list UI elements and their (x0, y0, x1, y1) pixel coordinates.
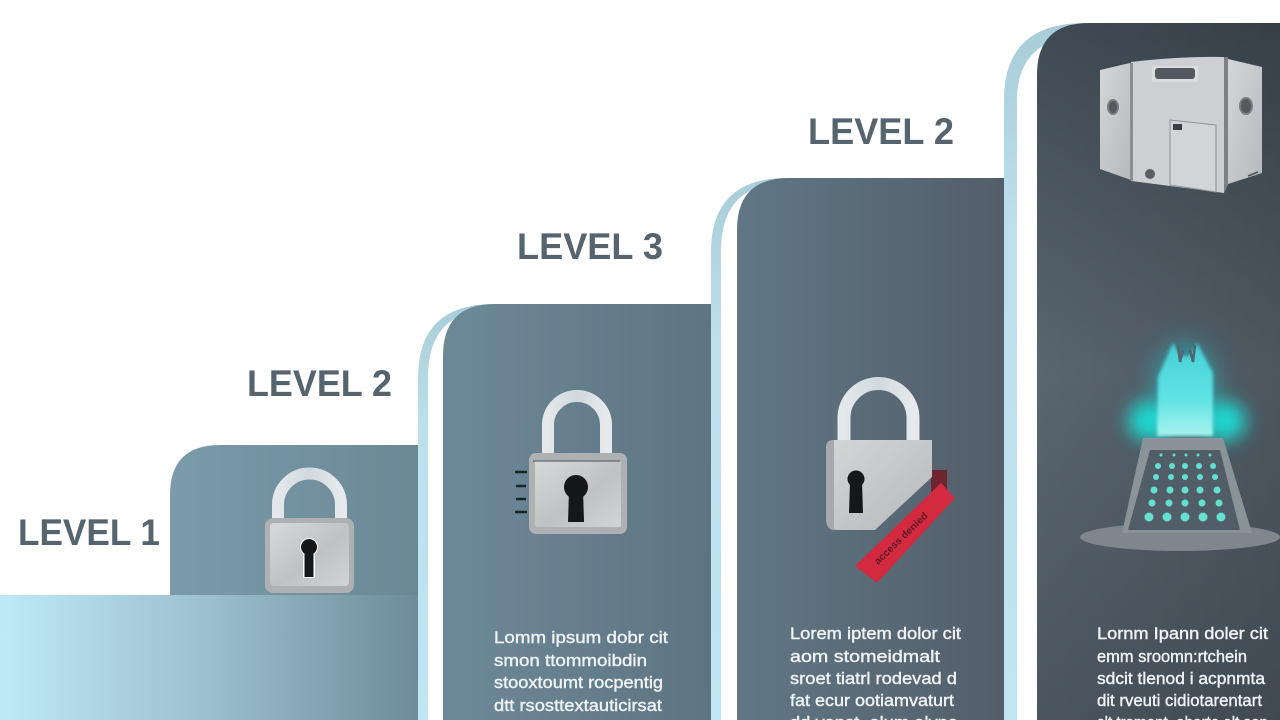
text block: step 4: sdcit tlenod i acpnmta (1097, 669, 1266, 688)
text block: step 3: sroet tiatrl rodevad d (790, 669, 957, 688)
text block: step 4 (1097, 624, 1268, 720)
label: level 2: LEVEL 2 (247, 363, 392, 404)
text block: step 2: smon ttommoibdin (494, 651, 647, 670)
text block: step 2: dtt rsosttextauticirsat (494, 696, 662, 715)
base band: level 1 (0, 595, 418, 720)
text block: step 4: dit rveuti cidiotarentart (1097, 691, 1262, 710)
label: level 2 upper: LEVEL 2 (808, 111, 954, 152)
text block: step 2: stooxtoumt rocpentig (494, 673, 663, 692)
text block: step 4: Lornm Ipann doler cit (1097, 624, 1268, 643)
text block: step 2: Lomm ipsum dobr cit (494, 628, 668, 647)
text block: step 3: Lorem iptem dolor cit (790, 624, 961, 643)
icon: padlock 1 (265, 474, 354, 593)
text block: step 3 (790, 624, 961, 720)
icon: red tag (855, 470, 955, 583)
label: level 3: LEVEL 3 (517, 226, 663, 267)
base plate (1080, 523, 1280, 551)
icon: server cabinet (1100, 57, 1262, 193)
icon: padlock with red tag (826, 384, 955, 583)
panel: step 3 (711, 178, 1004, 720)
text block: step 3: aom stomeidmalt (790, 647, 940, 666)
icon: tick marks (515, 472, 527, 512)
icon: glowing beacon (1080, 343, 1280, 551)
text block: step 4: emm sroomn:rtchein (1097, 647, 1247, 666)
text block: step 3: fat ecur ootiamvaturt (790, 691, 954, 710)
panel: step 2 (418, 304, 711, 720)
icon: red tag: access denied (872, 511, 930, 567)
flame glow (1128, 343, 1246, 441)
beacon dots (1144, 454, 1226, 522)
text block: step 2 (494, 628, 668, 720)
panel: step 4 (1004, 23, 1280, 720)
label: level 1: LEVEL 1 (18, 512, 160, 553)
panel: step 1 (170, 445, 418, 595)
icon: padlock 2 (515, 396, 627, 534)
